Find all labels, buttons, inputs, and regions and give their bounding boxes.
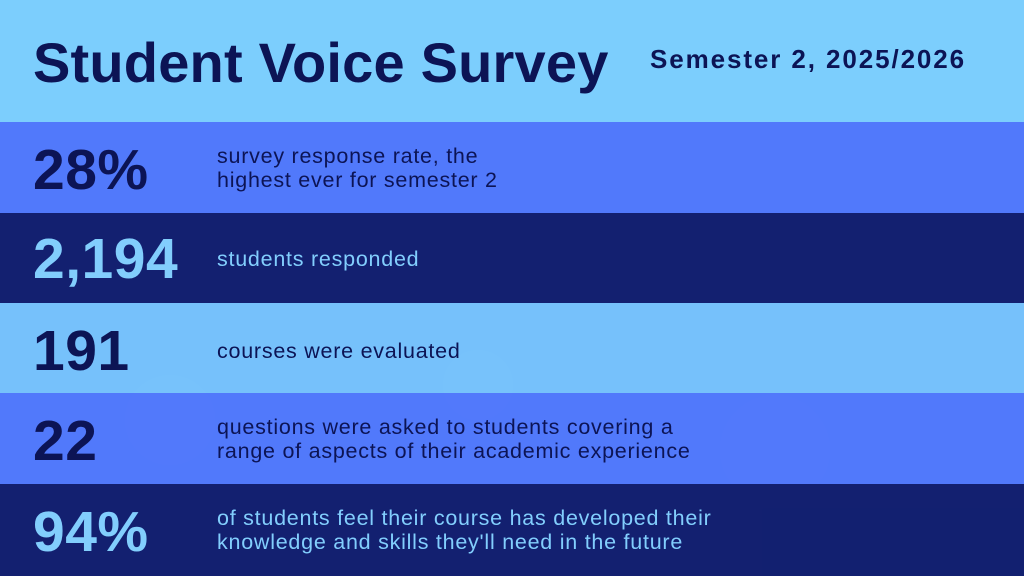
row: students responded: students responded bbox=[217, 247, 419, 271]
row: course development: of students feel their course has developed their bbox=[217, 506, 712, 530]
row: students responded: 2,194 bbox=[33, 227, 178, 291]
row: course development: 94% bbox=[33, 500, 149, 564]
row: students responded bbox=[0, 213, 1024, 303]
row: questions bbox=[0, 393, 1024, 484]
row: courses evaluated: courses were evaluated bbox=[217, 339, 461, 363]
row: questions: 22 bbox=[33, 409, 97, 473]
row: response rate: survey response rate, the bbox=[217, 144, 478, 168]
row: questions: questions were asked to students covering a bbox=[217, 415, 674, 439]
row: course development bbox=[0, 484, 1024, 576]
row: course development: knowledge and skills they'll need in the future bbox=[217, 530, 683, 554]
row: courses evaluated bbox=[0, 303, 1024, 393]
row: response rate: 28% bbox=[33, 138, 149, 202]
header: subtitle: Semester 2, 2025/2026 bbox=[650, 44, 966, 74]
row: courses evaluated: 191 bbox=[33, 319, 130, 383]
row: response rate bbox=[0, 122, 1024, 213]
row: questions: range of aspects of their academic experience bbox=[217, 439, 691, 463]
header: title: Student Voice Survey bbox=[33, 31, 609, 94]
row: response rate: highest ever for semester 2 bbox=[217, 168, 498, 192]
